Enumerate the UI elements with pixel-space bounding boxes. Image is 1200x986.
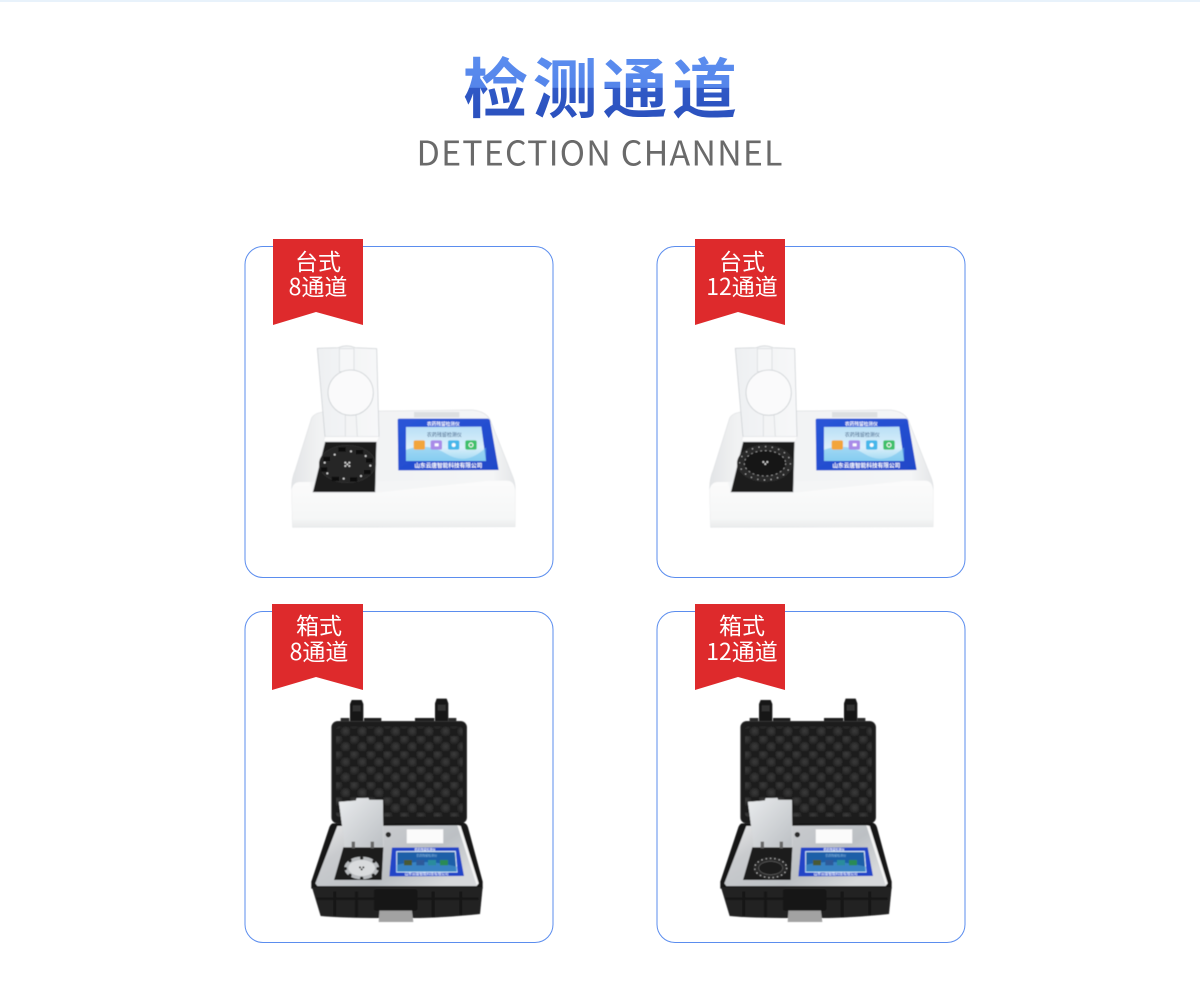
- device: benchtop analyzer 8 channel: 农药残留检测仪: [427, 432, 462, 439]
- panel: benchtop 8 channel: [245, 239, 553, 578]
- ribbon: case 8 channel: 8通道: [290, 633, 348, 667]
- device: case analyzer 8 channel: 农药残留检测仪: [416, 853, 437, 858]
- panel: benchtop 12 channel: [657, 239, 965, 578]
- ribbon: benchtop 12 channel: [695, 239, 785, 325]
- ribbon: case 12 channel: 箱式: [719, 607, 765, 641]
- device: case analyzer 8 channel: [311, 699, 483, 922]
- title: 检测通道: [463, 37, 737, 131]
- device: case analyzer 8 channel: 农药残留检测仪: [415, 847, 435, 852]
- subtitle: DETECTION CHANNEL: [416, 126, 782, 176]
- device: benchtop analyzer 12 channel: [710, 346, 933, 527]
- ribbon: case 12 channel: 12通道: [706, 633, 778, 667]
- device: case analyzer 12 channel: 农药残留检测仪: [824, 847, 844, 852]
- card frame: [657, 246, 965, 578]
- device: benchtop analyzer 12 channel: 农药残留检测仪: [845, 432, 880, 439]
- device: case analyzer 12 channel: 山东云唐智能科技有限公司: [814, 871, 858, 877]
- ribbon: case 8 channel: [272, 604, 363, 690]
- panel: case 12 channel: [657, 604, 965, 942]
- device: benchtop analyzer 12 channel: 山东云唐智能科技有限公司: [832, 460, 901, 469]
- ribbon: benchtop 8 channel: [273, 239, 363, 325]
- ribbon: case 12 channel: [695, 604, 785, 690]
- device: case analyzer 12 channel: [720, 699, 892, 922]
- top strip: [0, 0, 1200, 2]
- device: benchtop analyzer 12 channel: 农药残留检测仪: [845, 420, 878, 427]
- ribbon: benchtop 12 channel: 台式: [719, 243, 765, 277]
- card frame: [245, 246, 553, 578]
- device: benchtop analyzer 8 channel: [292, 346, 515, 527]
- ribbon: benchtop 8 channel: 8通道: [289, 268, 347, 302]
- card frame: [245, 612, 553, 942]
- ribbon: benchtop 8 channel: 台式: [295, 243, 341, 277]
- device: benchtop analyzer 8 channel: 农药残留检测仪: [427, 420, 460, 427]
- device: case analyzer 8 channel: 山东云唐智能科技有限公司: [405, 871, 449, 877]
- card frame: [657, 612, 965, 942]
- ribbon: benchtop 12 channel: 12通道: [706, 268, 778, 302]
- ribbon: case 8 channel: 箱式: [296, 607, 342, 641]
- device: benchtop analyzer 8 channel: 山东云唐智能科技有限公司: [414, 460, 483, 469]
- panel: case 8 channel: [245, 604, 553, 942]
- device: case analyzer 12 channel: 农药残留检测仪: [825, 853, 846, 858]
